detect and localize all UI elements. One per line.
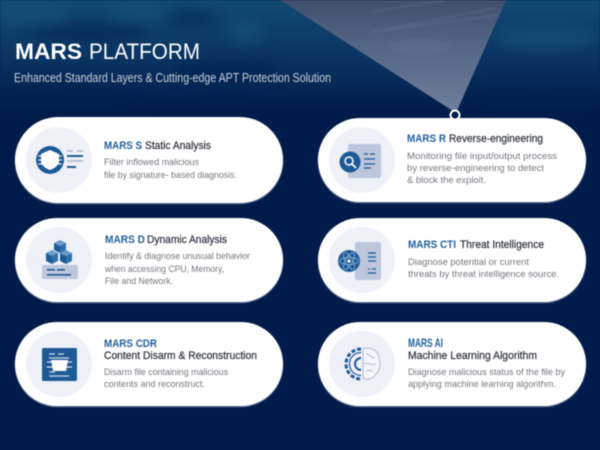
description: Identify & diagnose unusual behavior <box>105 251 250 262</box>
light beam <box>280 0 506 113</box>
panel: MARS CDR <box>15 322 283 406</box>
subtitle: Enhanced Standard Layers & Cutting-edge APT Protection Solution <box>14 71 331 85</box>
description <box>104 251 250 287</box>
description: threats by threat intelligence source. <box>408 269 559 280</box>
icon: atom document <box>329 227 395 293</box>
panel: MARS D <box>15 218 283 302</box>
description: Diagnose malicious status of the file by <box>408 367 565 378</box>
description <box>104 367 228 390</box>
panel: MARS S <box>15 117 283 203</box>
icon: shield chip document <box>26 127 92 193</box>
heading: MARS S <box>104 140 142 152</box>
panel: MARS CTI <box>318 218 586 302</box>
description: Filter inflowed malicious <box>104 157 199 168</box>
heading: MARS AI <box>408 338 443 350</box>
description: applying machine learning algorithm. <box>408 379 556 390</box>
description <box>104 157 237 181</box>
heading: Content Disarm & Reconstruction <box>104 350 257 362</box>
heading: Reverse-engineering <box>449 133 543 145</box>
heading <box>104 338 257 362</box>
heading: MARS CDR <box>104 338 157 350</box>
beam anchor ring <box>450 110 460 120</box>
description: Disarm file containing malicious <box>104 367 228 378</box>
heading: MARS D <box>105 234 145 246</box>
description: file by signature- based diagnosis. <box>104 170 237 181</box>
heading: Static Analysis <box>145 140 211 152</box>
title: MARS <box>15 39 82 64</box>
description <box>408 257 559 280</box>
heading: Machine Learning Algorithm <box>408 350 537 362</box>
title <box>15 39 200 64</box>
description: & block the exploit. <box>407 175 486 186</box>
heading: MARS R <box>407 133 446 145</box>
heading: Dynamic Analysis <box>147 234 227 246</box>
panel: MARS AI <box>318 322 586 406</box>
heading <box>105 234 227 246</box>
heading: Threat Intelligence <box>460 239 544 251</box>
description <box>408 367 565 390</box>
title: PLATFORM <box>89 39 200 64</box>
heading <box>408 338 537 362</box>
icon: magnifier document <box>329 127 395 193</box>
heading <box>407 133 543 145</box>
description: File and Network. <box>105 276 173 287</box>
icon: disarm document <box>26 331 92 397</box>
heading <box>104 140 211 152</box>
panel: MARS R <box>318 118 586 202</box>
description: contents and reconstruct. <box>104 379 205 390</box>
icon: cubes on server <box>26 227 92 293</box>
heading: MARS CTI <box>408 239 456 251</box>
icon: gear and brain <box>329 331 395 397</box>
description: when accessing CPU, Memory, <box>104 264 224 275</box>
description: Diagnose potential or current <box>408 257 529 268</box>
heading <box>408 239 544 251</box>
description: Monitoring file input/output process <box>407 151 557 162</box>
description: by reverse-engineering to detect <box>407 163 544 174</box>
description <box>407 151 557 186</box>
